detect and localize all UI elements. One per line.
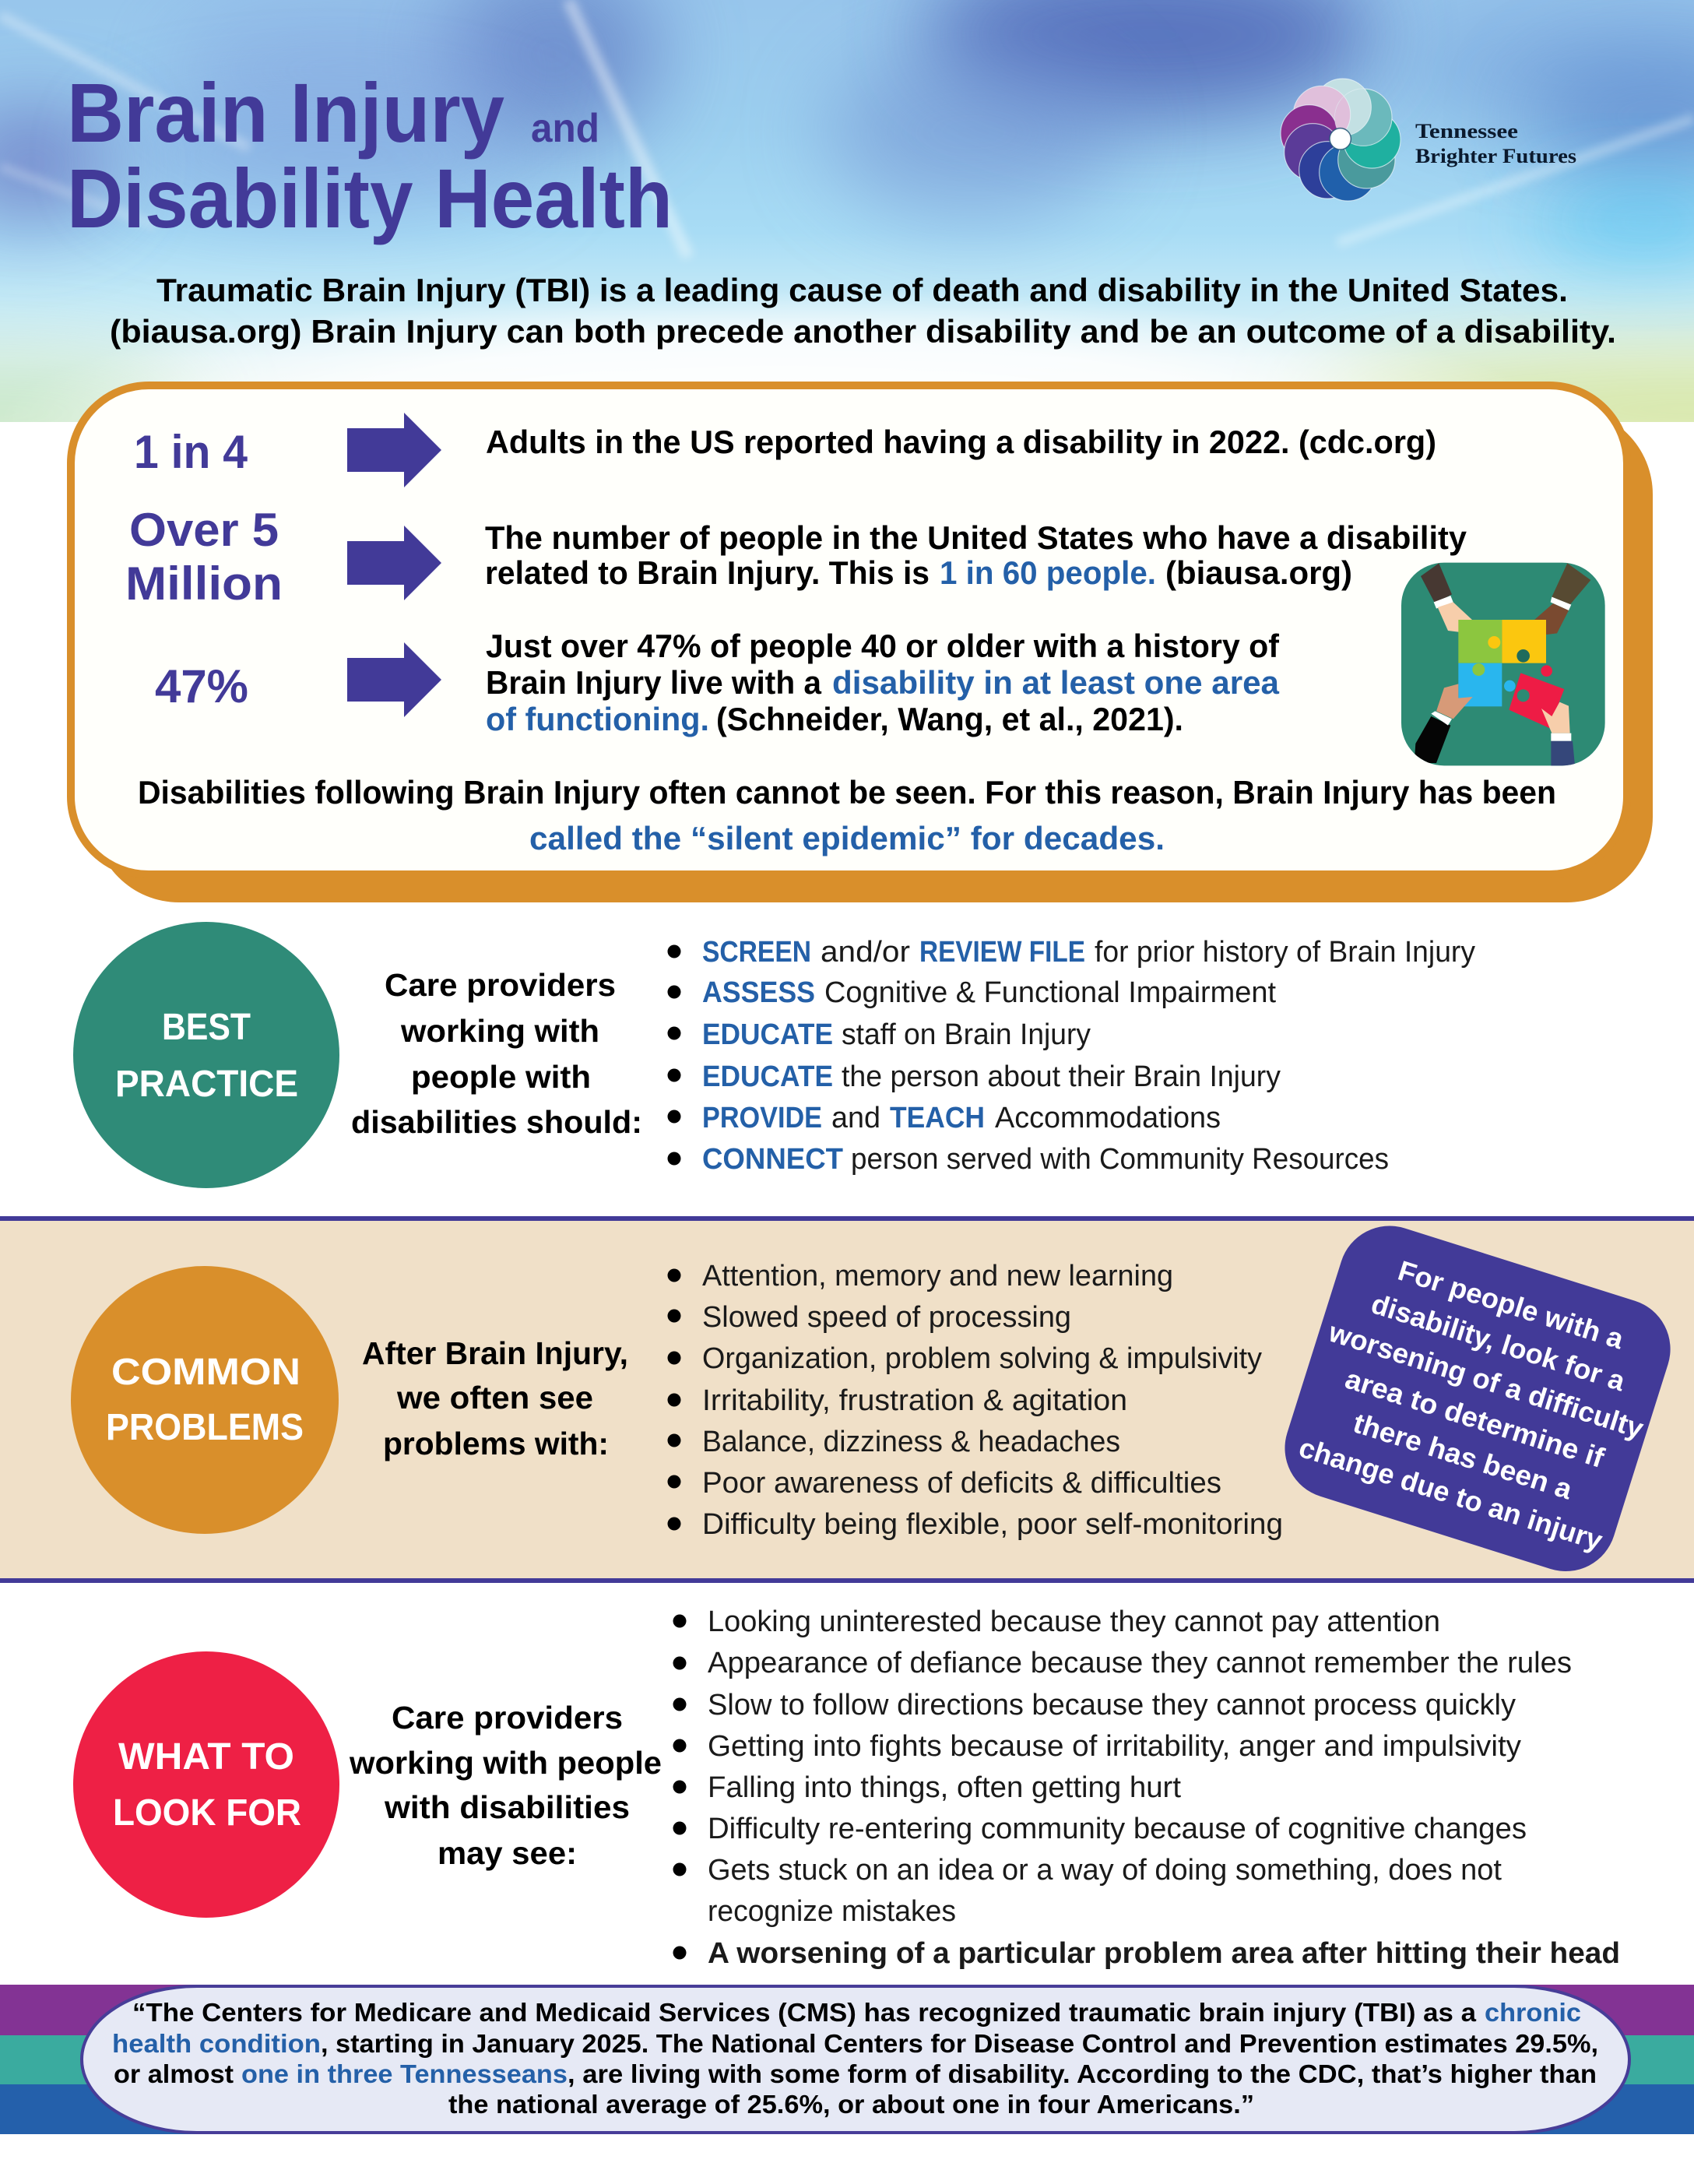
stat: over 5 million	[125, 504, 1467, 610]
callout: look for a worsening	[1272, 1213, 1683, 1584]
bullet list: common problems: Poor awareness of deficits & difficulties	[702, 1467, 1221, 1500]
quote text: , are living with some form of disability. According to the CDC, that’s higher than	[568, 2059, 1597, 2088]
quote pill	[82, 1986, 1629, 2133]
bullet list: what to look for: Gets stuck on an idea or a way of doing something, does not	[708, 1854, 1502, 1887]
section: best practice	[73, 922, 1475, 1188]
badge: common problems	[71, 1266, 339, 1534]
lead-in text: with disabilities	[384, 1789, 630, 1825]
panel card	[71, 385, 1627, 874]
bullet list: best practice: Accommodations	[995, 1102, 1221, 1134]
bullet list: what to look for: Difficulty re-entering community because of cognitive changes	[708, 1813, 1527, 1845]
footer: colour bands and quote	[0, 1985, 1694, 2134]
bullet list: best practice: CONNECT	[702, 1143, 843, 1176]
panel closing statement: called the “silent epidemic” for decades.	[529, 820, 1165, 856]
stat: over 5 million: The number of people in the United States who have a disability	[485, 519, 1467, 556]
logo: Tennessee Brighter Futures: Tennessee	[1415, 120, 1518, 142]
quote text: one in three Tennesseans	[241, 2059, 568, 2088]
stat: over 5 million: Million	[125, 557, 283, 610]
bullet list: best practice: TEACH	[890, 1102, 985, 1134]
bullet list: best practice: for prior history of Brain Injury	[1095, 936, 1475, 969]
stat: 1 in 4: Adults in the US reported having a disability in 2022. (cdc.org)	[486, 424, 1436, 460]
badge: best practice: BEST	[162, 1007, 251, 1048]
bullet list: what to look for: Falling into things, often getting hurt	[708, 1771, 1181, 1804]
stat: over 5 million: (biausa.org)	[1165, 554, 1352, 591]
stat: 47%: (Schneider, Wang, et al., 2021).	[716, 701, 1183, 737]
icon: puzzle and hands	[1401, 563, 1605, 768]
badge: best practice: PRACTICE	[115, 1064, 298, 1105]
bullet list: best practice: and/or	[821, 936, 910, 969]
bullet list: best practice: REVIEW FILE	[919, 936, 1085, 969]
lead-in text	[362, 1335, 628, 1461]
stat: over 5 million: related to Brain Injury. This is	[485, 554, 930, 591]
quote text: , starting in January 2025. The National Centers for Disease Control and Prevention estimates 29.5%,	[321, 2029, 1598, 2058]
bullet list: best practice: staff on Brain Injury	[842, 1018, 1091, 1051]
bullet list: best practice: EDUCATE	[702, 1018, 833, 1051]
stat: 47%: Just over 47% of people 40 or older with a history of	[486, 628, 1280, 664]
bullet list: what to look for: A worsening of a particular problem area after hitting their head	[708, 1937, 1620, 1970]
quote text: or almost	[114, 2059, 234, 2088]
bullet list: best practice: and	[831, 1102, 880, 1134]
callout: look for a worsening: worsening of a difficulty	[1324, 1315, 1647, 1444]
stat: 47%: 47%	[155, 660, 248, 712]
section: common problems	[0, 1213, 1694, 1584]
badge: common problems: PROBLEMS	[106, 1407, 304, 1448]
panel shadow	[93, 409, 1653, 902]
lead-in text: working with	[400, 1013, 599, 1049]
title: Disability Health	[67, 151, 673, 245]
badge: what to look for	[73, 1651, 339, 1918]
lead-in text: problems with:	[383, 1426, 609, 1461]
bullet list: what to look for: Getting into fights because of irritability, anger and impulsivity	[708, 1730, 1521, 1763]
logo: Tennessee Brighter Futures	[1281, 79, 1576, 201]
section: what to look for	[73, 1605, 1620, 1970]
section band	[0, 1219, 1694, 1581]
bullet list: common problems: Irritability, frustration & agitation	[702, 1384, 1127, 1417]
bullet list: best practice: Cognitive & Functional Impairment	[824, 976, 1276, 1009]
bullet list: what to look for: Looking uninterested because they cannot pay attention	[708, 1605, 1440, 1638]
callout: look for a worsening: area to determine if	[1341, 1363, 1608, 1474]
lead-in text: we often see	[396, 1380, 593, 1416]
callout: look for a worsening: change due to an injury	[1295, 1431, 1606, 1556]
lead-in text	[351, 967, 642, 1140]
bullet list: what to look for: Appearance of defiance because they cannot remember the rules	[708, 1647, 1572, 1679]
callout: look for a worsening: there has been a	[1350, 1407, 1576, 1506]
title: and	[531, 106, 599, 151]
lead-in text	[349, 1700, 662, 1871]
stat: 47%: of functioning.	[486, 701, 709, 737]
bullet list: best practice: PROVIDE	[702, 1102, 822, 1134]
badge: best practice	[73, 922, 339, 1188]
quote text: chronic	[1485, 1998, 1581, 2027]
bullet list: common problems: Balance, dizziness & headaches	[702, 1426, 1120, 1458]
lead-in text: may see:	[438, 1835, 577, 1871]
lead-in text: Care providers	[392, 1700, 623, 1736]
callout: look for a worsening: For people with a	[1394, 1254, 1628, 1356]
quote text: the national average of 25.6%, or about one in four Americans.”	[448, 2090, 1254, 2119]
bullet list: common problems: Attention, memory and new learning	[702, 1260, 1173, 1292]
bullet list: common problems: Difficulty being flexible, poor self-monitoring	[702, 1508, 1283, 1541]
bullet list: common problems: Organization, problem solving & impulsivity	[702, 1342, 1262, 1375]
stat: 47%	[155, 628, 1280, 737]
stat: 47%: Brain Injury live with a	[486, 664, 822, 701]
badge: what to look for: WHAT TO	[118, 1736, 294, 1778]
intro text: Traumatic Brain Injury (TBI) is a leading cause of death and disability in the United States.	[156, 272, 1568, 308]
logo: Tennessee Brighter Futures: Brighter Futures	[1415, 145, 1576, 167]
stat: 47%: disability in at least one area	[832, 664, 1280, 701]
bullet list: what to look for: Slow to follow directions because they cannot process quickly	[708, 1689, 1516, 1722]
intro text	[110, 272, 1616, 350]
bullet list: common problems: Slowed speed of processing	[702, 1301, 1071, 1334]
title	[67, 65, 673, 245]
lead-in text: people with	[411, 1059, 591, 1095]
bullet list: common problems	[668, 1260, 1283, 1541]
bullet list: what to look for	[673, 1605, 1620, 1970]
bullet list: best practice: SCREEN	[702, 936, 811, 969]
header sky background	[0, 0, 1694, 422]
bullet list: best practice: the person about their Brain Injury	[842, 1060, 1281, 1093]
bullet list: best practice: ASSESS	[702, 976, 815, 1009]
lead-in text: disabilities should:	[351, 1104, 642, 1140]
bullet list: best practice	[668, 936, 1475, 1176]
lead-in text: working with people	[349, 1745, 662, 1781]
stat: over 5 million: 1 in 60 people.	[940, 554, 1156, 591]
badge: common problems: COMMON	[111, 1352, 300, 1393]
lead-in text: Care providers	[385, 967, 616, 1003]
bullet list: what to look for: recognize mistakes	[708, 1895, 956, 1928]
quote text	[112, 1998, 1598, 2119]
bullet list: best practice: person served with Community Resources	[851, 1143, 1389, 1176]
stat: 1 in 4	[134, 413, 1436, 487]
stat: 1 in 4: 1 in 4	[134, 426, 248, 478]
callout: look for a worsening: disability, look for a	[1368, 1287, 1629, 1398]
title: Brain Injury	[67, 65, 504, 160]
bullet list: best practice: EDUCATE	[702, 1060, 833, 1093]
lead-in text: After Brain Injury,	[362, 1335, 628, 1371]
stat: over 5 million: Over 5	[129, 504, 279, 556]
intro text: (biausa.org) Brain Injury can both precede another disability and be an outcome of a disability.	[110, 313, 1616, 350]
quote text: “The Centers for Medicare and Medicaid Services (CMS) has recognized traumatic brain injury (TBI) as a	[132, 1998, 1477, 2027]
quote text: health condition	[112, 2029, 321, 2058]
colour bands	[0, 1985, 1694, 2134]
panel closing statement: Disabilities following Brain Injury often cannot be seen. For this reason, Brain Injury has been	[138, 774, 1556, 811]
icon: flower petals	[1281, 79, 1401, 201]
panel: key statistics	[71, 385, 1653, 902]
panel closing statement	[138, 774, 1556, 856]
badge: what to look for: LOOK FOR	[113, 1792, 301, 1834]
